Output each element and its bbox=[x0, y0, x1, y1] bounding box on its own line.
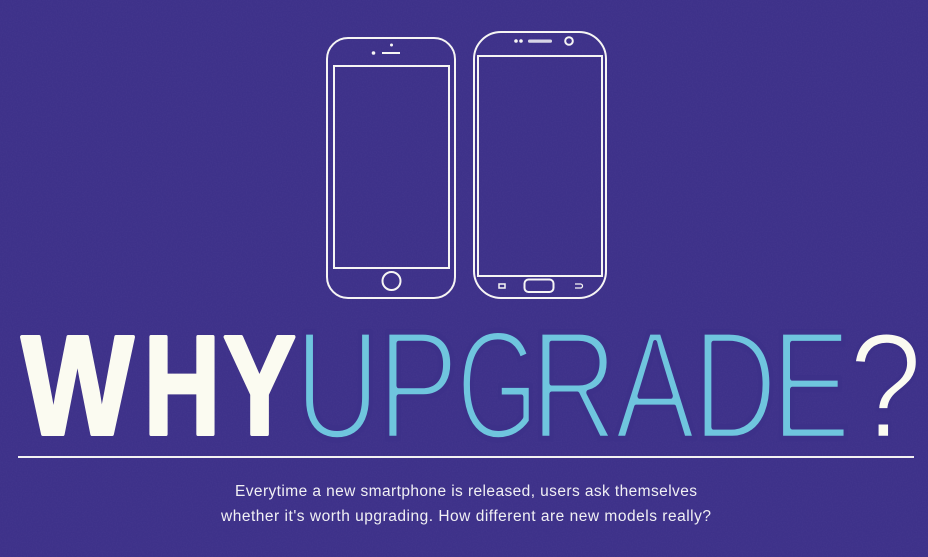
title word: UPGRADE: U bbox=[295, 299, 380, 472]
title word: WHY: H bbox=[144, 307, 220, 465]
icon: iPhone outline bbox=[327, 38, 455, 298]
intro text: Everytime a new smartphone is released, users ask themselves bbox=[235, 483, 697, 500]
intro text bbox=[220, 483, 711, 525]
icon: Android phone outline bbox=[474, 32, 606, 298]
title word: WHY bbox=[22, 306, 296, 465]
title word: UPGRADE: E bbox=[771, 300, 851, 472]
divider rule bbox=[18, 456, 914, 458]
title mark: question: ? bbox=[849, 302, 922, 469]
title word: UPGRADE: G bbox=[457, 299, 538, 472]
title word: UPGRADE bbox=[295, 299, 851, 472]
title word: UPGRADE: D bbox=[693, 299, 777, 472]
title word: WHY: Y bbox=[223, 306, 296, 464]
title word: UPGRADE: R bbox=[530, 299, 618, 472]
title word: WHY: W bbox=[22, 306, 133, 464]
title bbox=[22, 299, 922, 472]
title word: UPGRADE: P bbox=[377, 299, 459, 472]
title word: UPGRADE: A bbox=[615, 299, 696, 472]
intro text: whether it's worth upgrading. How different are new models really? bbox=[220, 508, 711, 525]
